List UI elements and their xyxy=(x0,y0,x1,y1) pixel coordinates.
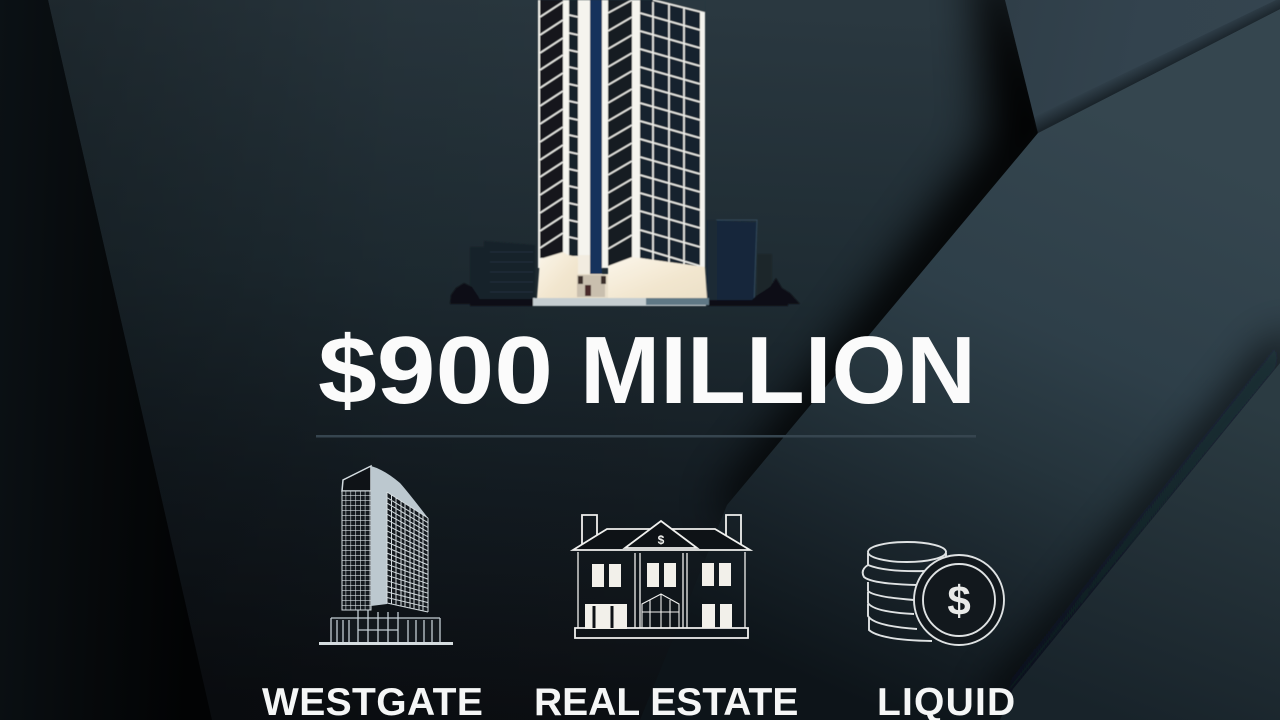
tower base xyxy=(533,252,709,306)
narrow face floor lines xyxy=(569,15,578,239)
right grid xyxy=(640,0,705,266)
background buildings left xyxy=(450,241,540,306)
icon: Liquid coins: $ xyxy=(947,577,971,624)
title xyxy=(318,317,976,424)
middle face floor lines xyxy=(608,0,632,249)
hero skyscraper illustration xyxy=(450,0,800,306)
tower faces xyxy=(538,0,705,274)
left face floor lines xyxy=(540,2,563,248)
icon: Westgate tower xyxy=(319,466,453,645)
background buildings right xyxy=(707,220,800,306)
windows xyxy=(585,563,732,629)
icon: Real estate mansion xyxy=(573,515,750,638)
icon: Liquid coins xyxy=(863,542,1004,645)
title: MILLION xyxy=(580,317,976,424)
divider xyxy=(316,435,976,438)
icon: Real estate mansion: $ xyxy=(658,533,665,547)
title: $900 xyxy=(318,317,553,424)
